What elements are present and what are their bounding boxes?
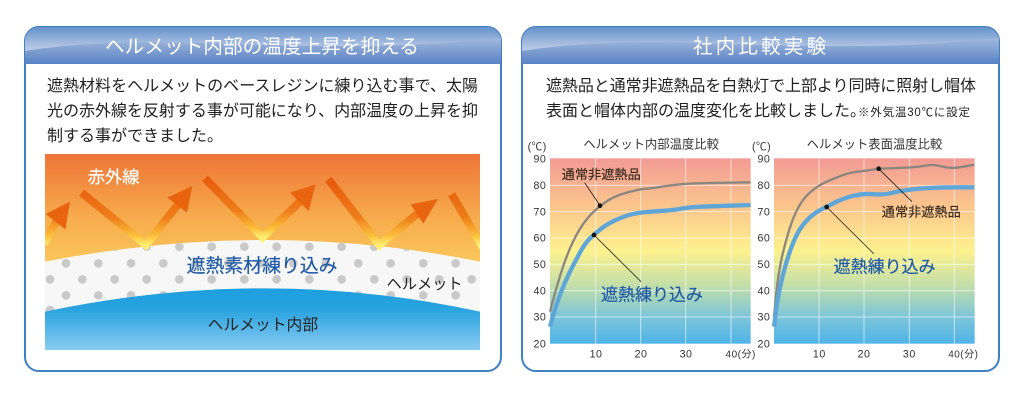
diagram: infrared reflection on helmet — [44, 154, 483, 350]
label: helmet interior: ヘルメット内部 — [208, 316, 318, 334]
x axis labels: 10 — [590, 348, 602, 360]
y axis labels: 20 — [533, 338, 546, 350]
y axis labels: 30 — [533, 312, 546, 324]
helmet interior — [45, 288, 480, 350]
sky area — [45, 154, 480, 264]
plot background — [550, 158, 751, 344]
chart title: ヘルメット表面温度比較 — [807, 137, 942, 152]
y axis labels: 50 — [757, 259, 770, 271]
line: standard product — [550, 182, 751, 312]
panel header: right — [522, 27, 999, 64]
label: helmet: ヘルメット — [387, 276, 463, 293]
plot background — [774, 158, 975, 344]
y axis labels: 90 — [533, 153, 546, 165]
y axis labels: 50 — [533, 259, 546, 271]
chart title: ヘルメット内部温度比較 — [583, 137, 719, 152]
helmet shell band with dots — [45, 240, 480, 314]
arrows: reflected infrared rays — [44, 178, 483, 248]
x axis labels: 40(分) — [948, 348, 978, 360]
x axis labels: 10 — [813, 348, 826, 360]
chart: helmet surface temperature — [752, 137, 978, 360]
text block: right description — [546, 77, 976, 120]
text block: right description: 表面と帽体内部の温度変化を比較しました。 — [546, 102, 866, 120]
callout: standard product: 通常非遮熱品 — [882, 205, 961, 220]
text block: left description — [47, 77, 478, 145]
text block: left description: 光の赤外線を反射する事が可能になり、内部温度の上昇を抑 — [47, 102, 478, 120]
y axis labels: 20 — [757, 338, 770, 350]
y axis labels: 80 — [757, 180, 770, 192]
x axis labels: 20 — [858, 348, 870, 360]
heading: right panel: 社内比較実験 — [693, 36, 826, 58]
y axis labels: 70 — [757, 206, 770, 218]
y axis labels — [757, 153, 770, 350]
callout: standard product — [824, 166, 961, 254]
y axis labels — [533, 153, 546, 350]
line: standard product — [774, 165, 974, 317]
line: heat shield product — [550, 205, 751, 327]
text block: left description: 制する事ができました。 — [47, 127, 223, 145]
y axis labels: 80 — [533, 180, 546, 192]
panel: in-house comparison test — [522, 27, 999, 371]
y axis labels: 60 — [533, 233, 546, 245]
callout: standard product: 通常非遮熱品 — [562, 167, 641, 182]
line: heat shield product — [774, 187, 974, 327]
unit label: (℃) — [752, 141, 771, 153]
label: heat shield material: 遮熱素材練り込み — [187, 255, 338, 276]
x axis labels: 20 — [635, 348, 647, 360]
unit label: (℃) — [528, 141, 546, 153]
y axis labels: 60 — [757, 233, 770, 245]
text block: right description: 遮熱品と通常非遮熱品を白熱灯で上部より同時に照射し帽体 — [546, 77, 976, 95]
x axis labels: 40(分) — [726, 348, 756, 360]
y axis labels: 40 — [533, 285, 546, 297]
y axis labels: 40 — [757, 285, 770, 297]
y axis labels: 90 — [757, 153, 770, 165]
y axis labels: 70 — [533, 206, 546, 218]
x axis labels: 30 — [680, 348, 692, 360]
panel: helmet temperature suppression — [25, 27, 501, 371]
x axis labels: 30 — [903, 348, 916, 360]
heading: left panel: ヘルメット内部の温度上昇を抑える — [105, 36, 419, 58]
callout: heat shield product: 遮熱練り込み — [601, 286, 703, 305]
callout: standard product — [562, 167, 641, 282]
panel header: left — [25, 27, 501, 64]
text block: right description: ※外気温30℃に設定 — [858, 105, 970, 119]
x axis labels — [813, 348, 978, 360]
x axis labels — [590, 348, 756, 360]
text block: left description: 遮熱材料をヘルメットのベースレジンに練り込む事で、太陽 — [47, 77, 478, 95]
label: infrared: 赤外線 — [88, 167, 140, 187]
chart: helmet interior temperature — [528, 137, 756, 360]
callout: heat shield product: 遮熱練り込み — [834, 257, 936, 276]
y axis labels: 30 — [757, 312, 770, 324]
